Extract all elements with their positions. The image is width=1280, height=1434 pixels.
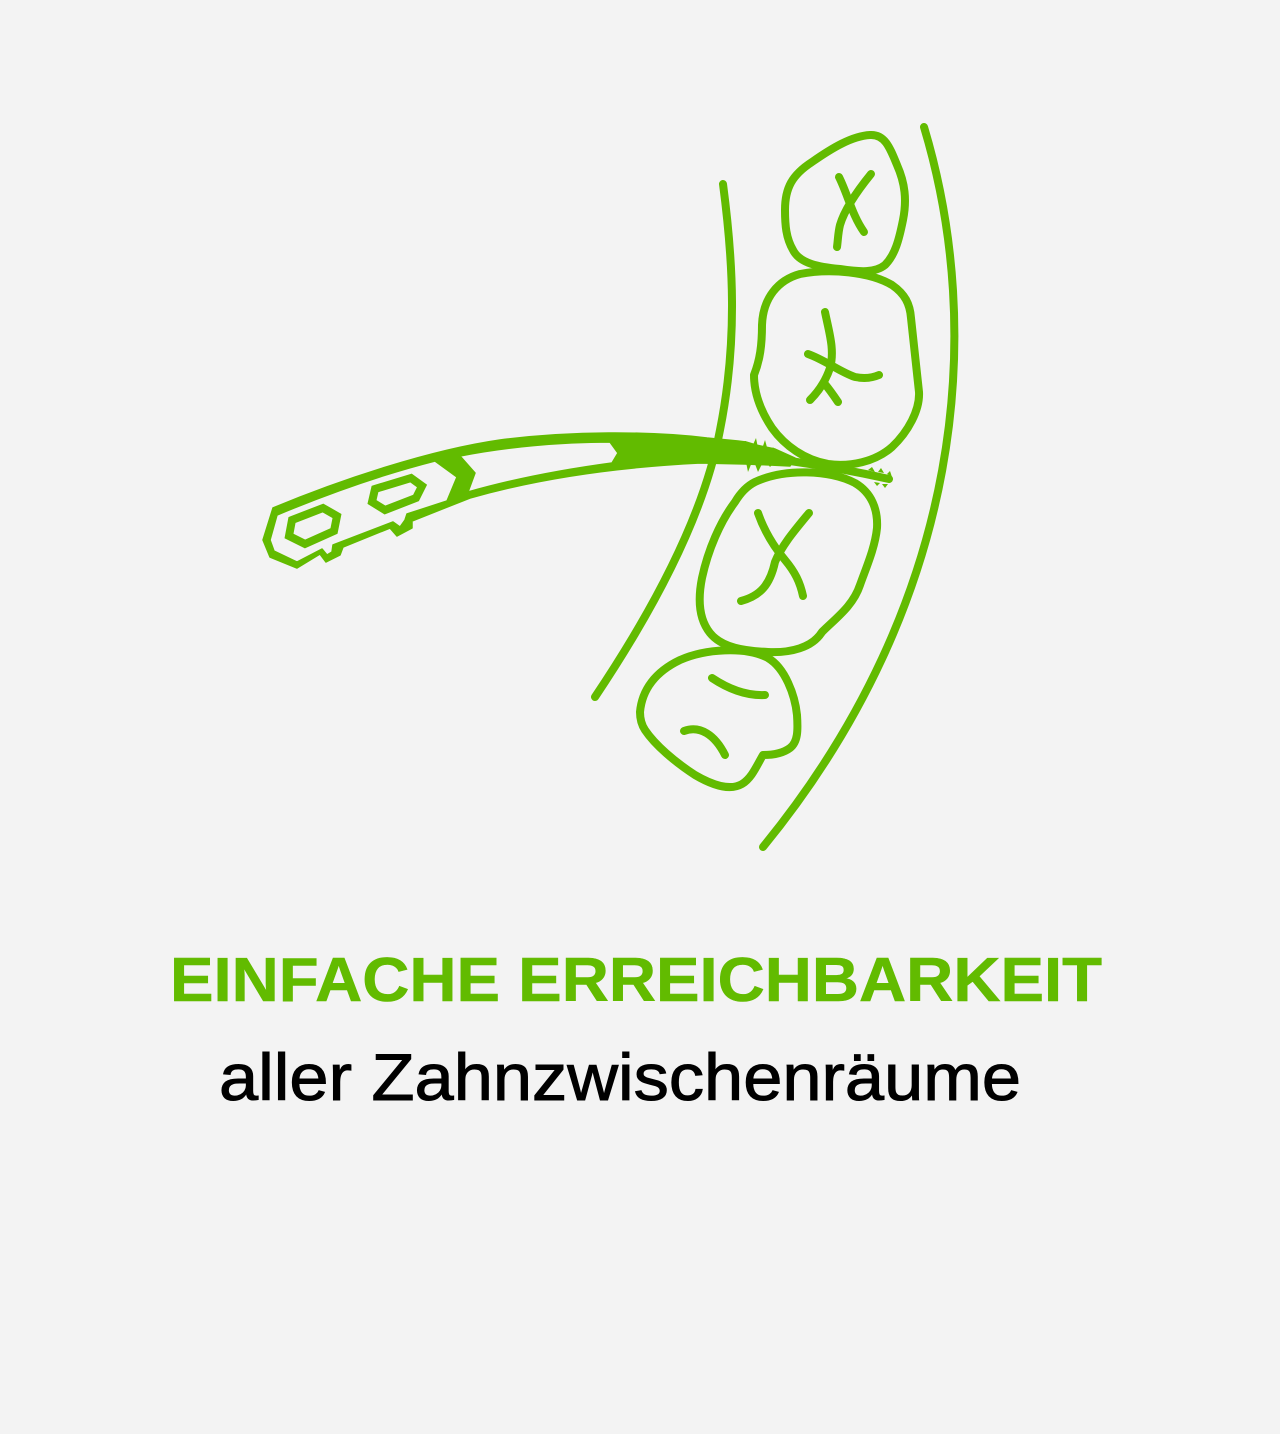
handle opening 2 [372, 478, 422, 510]
tooth 4 with fissure [640, 650, 797, 787]
tooth 2 with fissure [754, 271, 919, 465]
tooth 3 with fissure [700, 472, 877, 652]
illustration: interdental brush reaching between teeth [263, 127, 954, 847]
handle opening 1 [289, 508, 337, 544]
bristles [740, 438, 892, 488]
gum line: outer arc [763, 127, 954, 847]
tooth 1 with fissure [785, 135, 905, 271]
gum line: inner arc [595, 184, 732, 697]
brush wire tip [790, 461, 889, 479]
subheading: aller Zahnzwischenräume [219, 1040, 1021, 1114]
heading: EINFACHE ERREICHBARKEIT [170, 946, 1102, 1015]
interdental brush handle and head [263, 433, 892, 568]
